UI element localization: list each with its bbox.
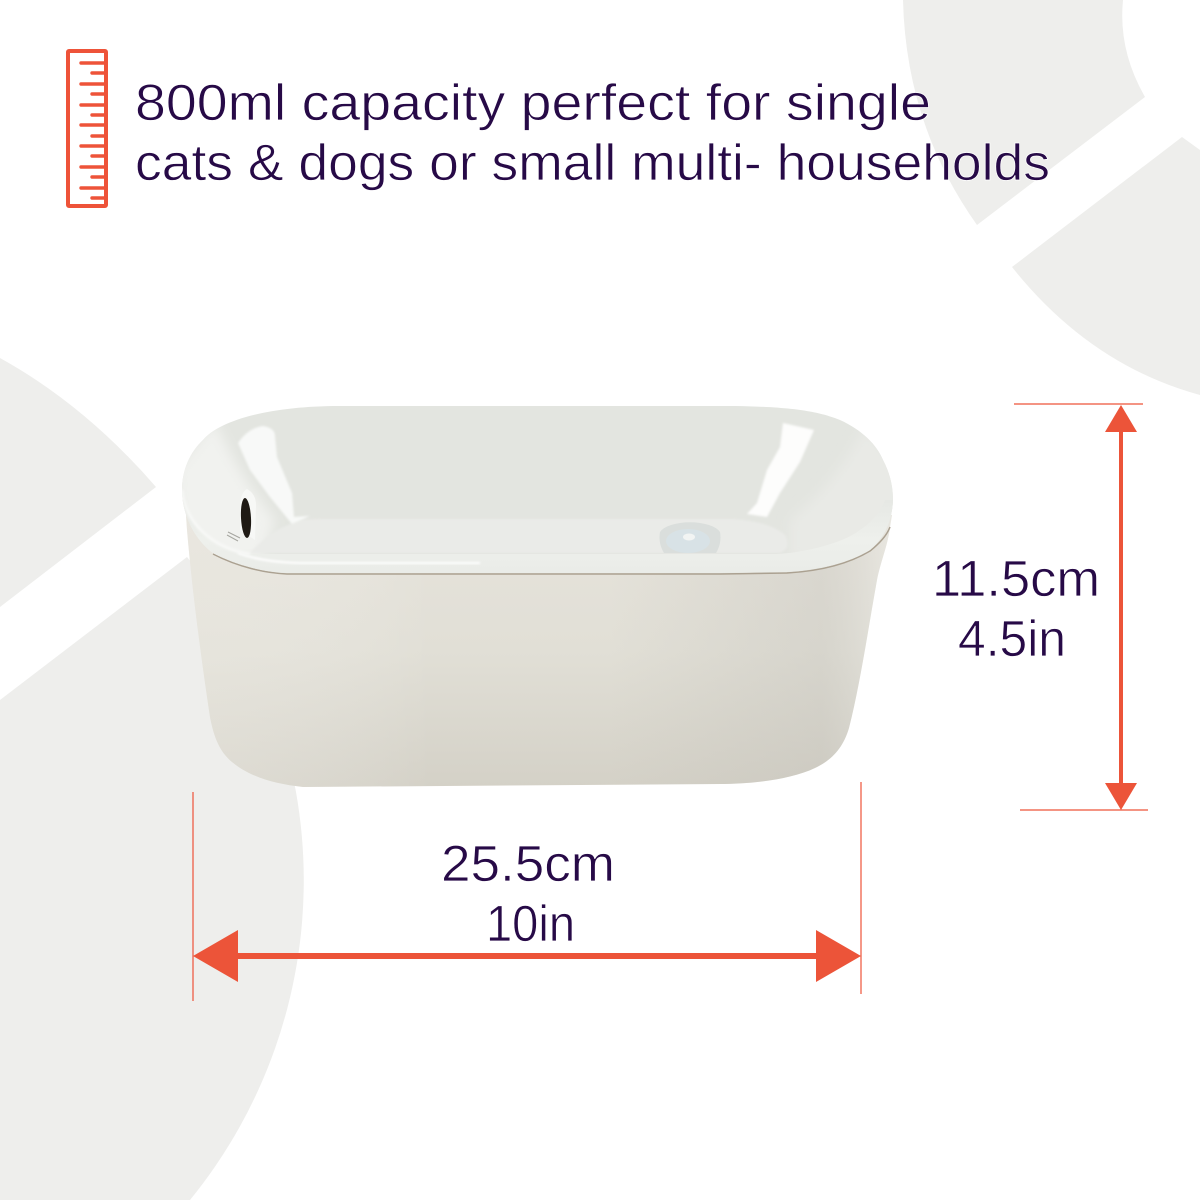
heading: capacity text: 800ml capacity perfect for single: [135, 74, 931, 131]
arrow: width dimension: [193, 782, 861, 1001]
highlight: right: [747, 423, 814, 517]
lid right slope: [790, 425, 900, 560]
arrow: height dimension: [1014, 404, 1148, 810]
label: height: 11.5cm: [932, 550, 1100, 607]
label: height: [932, 550, 1100, 667]
icon: ruler: [68, 51, 106, 206]
label: width: 25.5cm: [441, 835, 615, 892]
label: width: 10in: [486, 895, 575, 952]
heading: capacity text: cats & dogs or small multi- households: [135, 134, 1050, 191]
fountain lid: [175, 404, 900, 580]
label: width: [441, 835, 615, 952]
heading: capacity text: [135, 74, 1050, 191]
lid front rim: [218, 550, 870, 573]
lid left slope: [182, 430, 272, 554]
fountain base: [186, 515, 892, 787]
highlight: left: [238, 426, 310, 524]
lid shadow line: [213, 527, 890, 574]
label: height: 4.5in: [958, 610, 1066, 667]
drain gasket: [660, 522, 720, 553]
product: ceramic water fountain: [175, 404, 900, 787]
lid floor: [280, 529, 288, 551]
spout opening: [227, 489, 256, 541]
